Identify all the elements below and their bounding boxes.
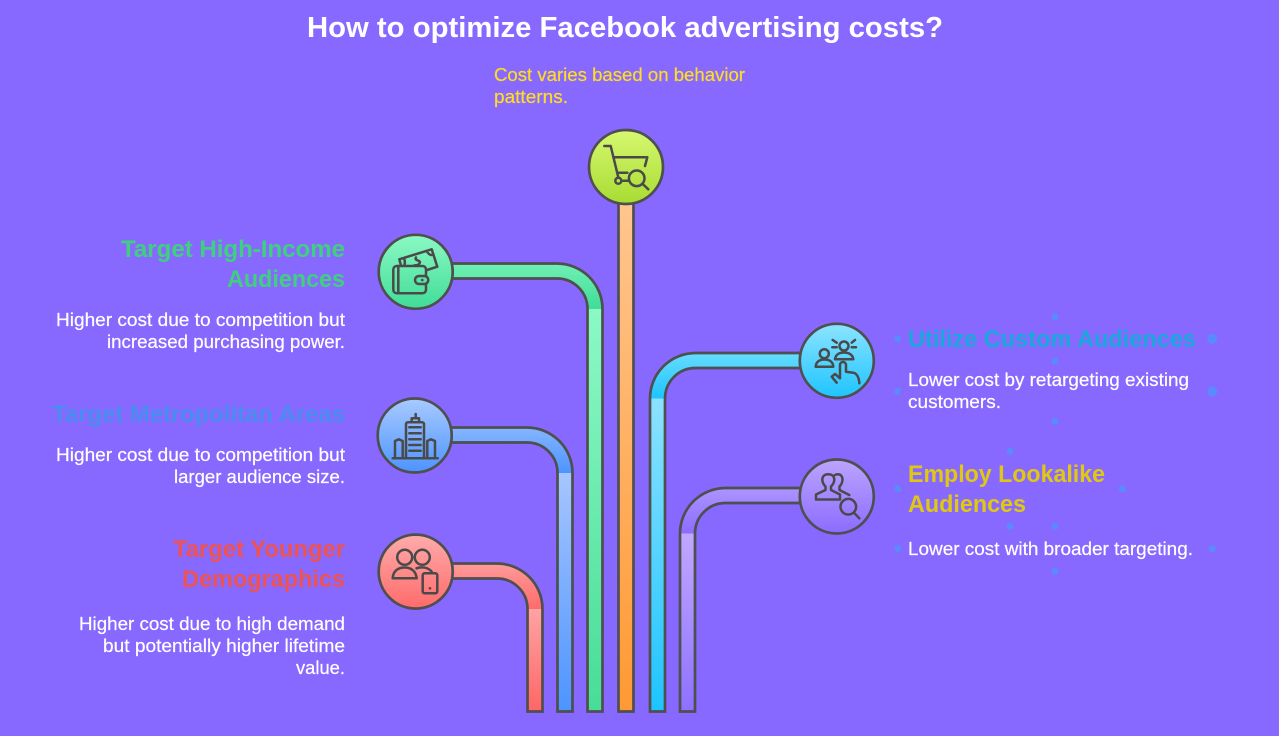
connector: younger demographics (red) xyxy=(415,564,542,712)
connector: high-income audiences (green) xyxy=(415,264,602,712)
heading: Utilize Custom Audiences xyxy=(908,326,1196,353)
panel: target younger demographics xyxy=(79,536,345,678)
icon: wallet with cash xyxy=(379,235,453,309)
heading xyxy=(121,236,345,293)
icon: people with phone xyxy=(379,535,453,609)
panel: utilize custom audiences xyxy=(908,326,1196,412)
panel: employ lookalike audiences xyxy=(908,461,1193,559)
callout: behavior patterns text: Cost varies based on behavior xyxy=(494,65,745,85)
description: Lower cost with broader targeting. xyxy=(908,539,1193,559)
description: but potentially higher lifetime xyxy=(103,636,345,656)
description: Higher cost due to competition but xyxy=(56,310,345,330)
heading xyxy=(173,536,345,593)
panel: target high-income audiences xyxy=(56,236,345,352)
heading: Target Younger xyxy=(173,536,345,563)
heading: Target Metropolitan Areas xyxy=(52,401,345,428)
icon: city buildings xyxy=(378,398,452,472)
icon: lookalike people with magnifier xyxy=(800,460,874,534)
title: How to optimize Facebook advertising costs? xyxy=(307,12,943,44)
description: Higher cost due to competition but xyxy=(56,445,345,465)
description: Higher cost due to high demand xyxy=(79,614,345,634)
panel: target metropolitan areas xyxy=(52,401,345,487)
connector: lookalike audiences (purple) xyxy=(680,488,837,712)
heading: Audiences xyxy=(908,491,1026,518)
description: Lower cost by retargeting existing xyxy=(908,370,1189,390)
heading: Employ Lookalike xyxy=(908,461,1105,488)
icon: shopping cart with magnifier xyxy=(589,130,663,204)
decorative blue dots behind right text xyxy=(894,313,1217,575)
description xyxy=(79,614,345,678)
description xyxy=(56,445,345,487)
description xyxy=(908,370,1189,412)
heading: Audiences xyxy=(227,266,345,293)
callout: behavior patterns text xyxy=(494,65,745,107)
description xyxy=(56,310,345,352)
heading: Target High-Income xyxy=(121,236,345,263)
callout: behavior patterns text: patterns. xyxy=(494,87,568,107)
heading: Demographics xyxy=(182,566,345,593)
icon: custom audience with pointing hand xyxy=(800,324,874,398)
connector: metropolitan areas (blue) xyxy=(415,428,572,712)
description: increased purchasing power. xyxy=(107,332,345,352)
connector: custom audiences (cyan) xyxy=(650,353,837,712)
connector: behavior patterns (orange) xyxy=(618,200,634,712)
description: value. xyxy=(296,658,345,678)
description: customers. xyxy=(908,392,1001,412)
heading xyxy=(908,461,1105,518)
description: larger audience size. xyxy=(174,467,345,487)
